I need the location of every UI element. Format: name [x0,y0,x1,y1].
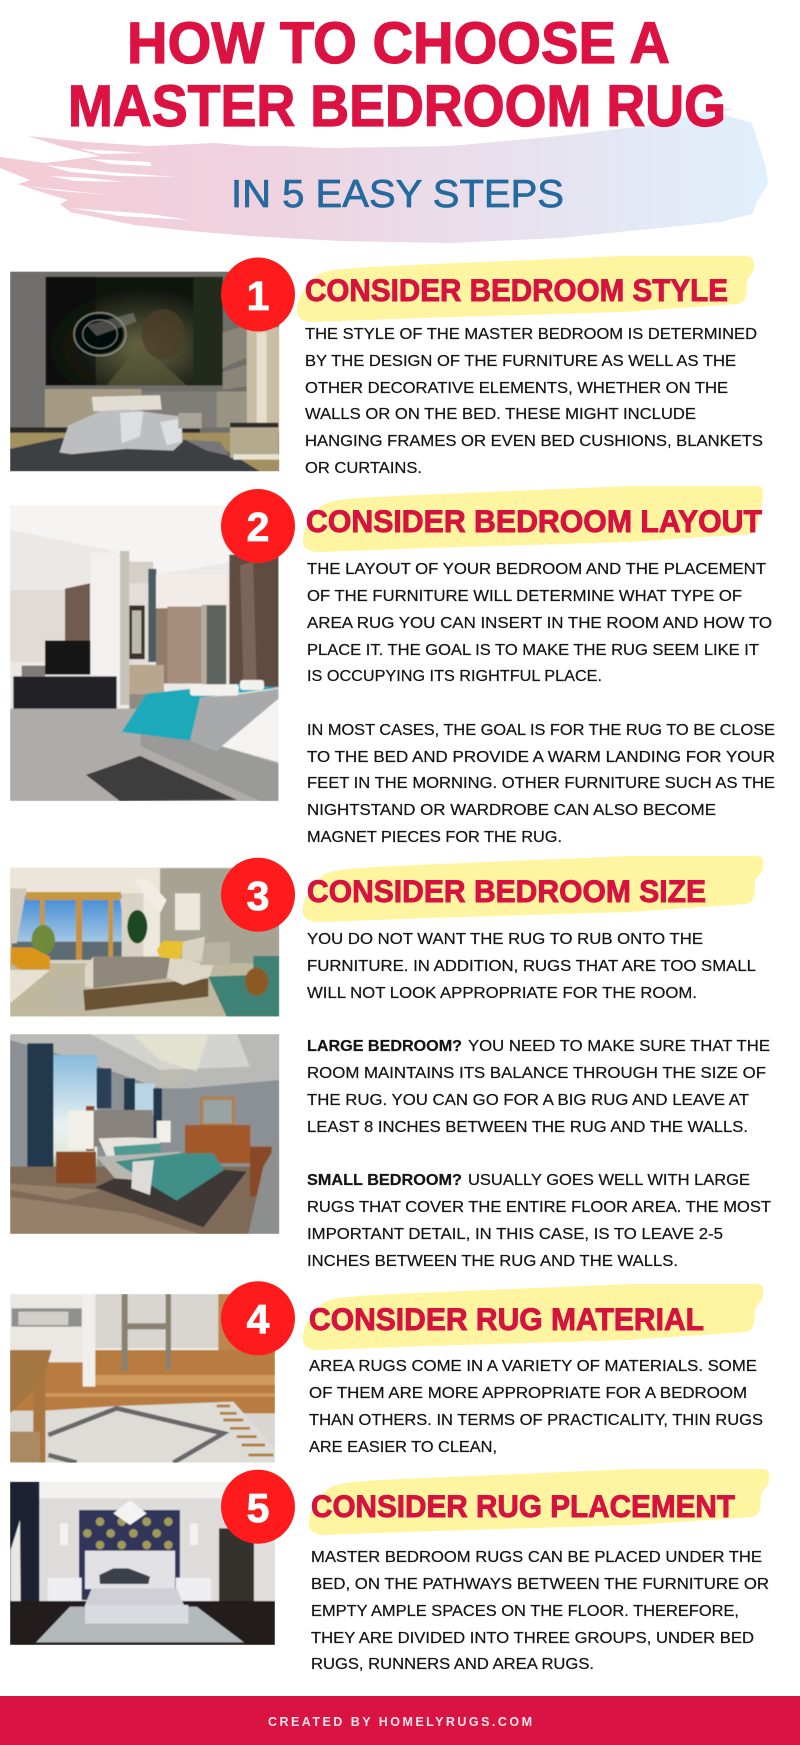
heading highlight 2 [303,486,763,552]
body text 3: ROOM MAINTAINS ITS BALANCE THROUGH THE SIZE OF [307,1065,766,1082]
photo: sunny bedroom with teal armchair [10,867,279,1017]
body text 1: THE STYLE OF THE MASTER BEDROOM IS DETERMINED [305,326,757,343]
heading highlight 4 [303,1284,763,1350]
body text 2: NIGHTSTAND OR WARDROBE CAN ALSO BECOME [307,802,716,819]
body text 5 [311,1549,769,1673]
title [68,11,726,139]
body text 4 [309,1358,763,1456]
body text 3: USUALLY GOES WELL WITH LARGE [468,1172,750,1189]
body text 5: MASTER BEDROOM RUGS CAN BE PLACED UNDER THE [311,1549,762,1566]
number badge 3 [221,858,295,932]
number badge 1 [221,258,295,332]
body text 3: THE RUG. YOU CAN GO FOR A BIG RUG AND LEAVE AT [307,1092,750,1109]
step 4 [221,1281,763,1456]
subtitle: IN 5 EASY STEPS [231,173,564,216]
photo: bedroom with navy curtains and wood floor [10,1034,279,1234]
body text 2: TO THE BED AND PROVIDE A WARM LANDING FOR YOUR [307,749,775,766]
photo: shaggy white rug on wood floor [10,1294,275,1463]
body text 3: IMPORTANT DETAIL, IN THIS CASE, IS TO LEAVE 2-5 [307,1226,723,1243]
heading 5: CONSIDER RUG PLACEMENT [311,1488,735,1524]
number badge 5 [221,1470,295,1544]
body text 1: WALLS OR ON THE BED. THESE MIGHT INCLUDE [305,406,696,423]
number badge 2 [221,489,295,563]
body text 3: FURNITURE. IN ADDITION, RUGS THAT ARE TOO SMALL [307,958,756,975]
body text 2 [307,561,775,846]
body text 5: EMPTY AMPLE SPACES ON THE FLOOR. THEREFORE, [311,1603,739,1620]
number badge 5: 5 [247,1485,269,1531]
body text 3: SMALL BEDROOM? [307,1172,462,1189]
heading highlight 5 [309,1469,769,1535]
body text 2: OF THE FURNITURE WILL DETERMINE WHAT TYPE OF [307,588,742,605]
title: HOW TO CHOOSE A [127,11,670,76]
body text 1 [305,326,763,477]
body text 3: WILL NOT LOOK APPROPRIATE FOR THE ROOM. [307,985,697,1002]
number badge 1: 1 [247,273,269,319]
heading highlight 3 [303,856,763,922]
heading 3: CONSIDER BEDROOM SIZE [307,873,706,909]
photo: concrete bedroom with dark artwork [10,271,279,471]
heading 4: CONSIDER RUG MATERIAL [309,1301,704,1337]
body text 3: YOU DO NOT WANT THE RUG TO RUB ONTO THE [307,931,703,948]
body text 2: FEET IN THE MORNING. OTHER FURNITURE SUCH AS THE [307,775,775,792]
body text 3: YOU NEED TO MAKE SURE THAT THE [468,1038,770,1055]
body text 2: AREA RUG YOU CAN INSERT IN THE ROOM AND HOW TO [307,615,772,632]
number badge 2: 2 [247,504,269,550]
body text 1: HANGING FRAMES OR EVEN BED CUSHIONS, BLANKETS [305,433,763,450]
body text 3: INCHES BETWEEN THE RUG AND THE WALLS. [307,1253,678,1270]
number badge 4 [221,1281,295,1355]
body text 2: IN MOST CASES, THE GOAL IS FOR THE RUG TO BE CLOSE [307,722,775,739]
body text 3: RUGS THAT COVER THE ENTIRE FLOOR AREA. THE MOST [307,1199,772,1216]
heading 2: CONSIDER BEDROOM LAYOUT [306,503,762,539]
body text 2: PLACE IT. THE GOAL IS TO MAKE THE RUG SEEM LIKE IT [307,642,760,659]
title: MASTER BEDROOM RUG [68,74,726,139]
body text 2: THE LAYOUT OF YOUR BEDROOM AND THE PLACEMENT [307,561,767,578]
body text 3: LARGE BEDROOM? [307,1038,462,1055]
photo: white tufted bed with floral accent wall [10,1482,275,1645]
body text 3: LEAST 8 INCHES BETWEEN THE RUG AND THE WALLS. [307,1119,748,1136]
body text 5: RUGS, RUNNERS AND AREA RUGS. [311,1656,594,1673]
footer: CREATED BY HOMELYRUGS.COM [268,1715,532,1729]
heading highlight 1 [297,256,754,322]
body text 1: OR CURTAINS. [305,460,422,477]
body text 2: MAGNET PIECES FOR THE RUG. [307,829,562,846]
step 2 [221,486,775,846]
body text 1: OTHER DECORATIVE ELEMENTS, WHETHER ON THE [305,380,728,397]
footer [0,1696,800,1745]
body text 3 [307,931,772,1270]
body text 2: IS OCCUPYING ITS RIGHTFUL PLACE. [307,668,602,685]
step 5 [221,1469,769,1673]
body text 5: BED, ON THE PATHWAYS BETWEEN THE FURNITURE OR [311,1576,769,1593]
body text 5: THEY ARE DIVIDED INTO THREE GROUPS, UNDER BED [311,1630,754,1647]
step 1 [221,256,763,477]
number badge 3: 3 [247,873,269,919]
body text 4: AREA RUGS COME IN A VARIETY OF MATERIALS. SOME [309,1358,757,1375]
photo: bright bedroom with teal blanket [10,505,279,801]
heading 1: CONSIDER BEDROOM STYLE [305,272,728,308]
body text 4: THAN OTHERS. IN TERMS OF PRACTICALITY, THIN RUGS [309,1412,763,1429]
number badge 4: 4 [247,1296,270,1342]
body text 4: OF THEM ARE MORE APPROPRIATE FOR A BEDROOM [309,1385,747,1402]
body text 1: BY THE DESIGN OF THE FURNITURE AS WELL AS THE [305,353,736,370]
body text 4: ARE EASIER TO CLEAN, [309,1439,497,1456]
paint brush stroke behind subtitle [0,107,768,243]
step 3 [221,856,772,1270]
